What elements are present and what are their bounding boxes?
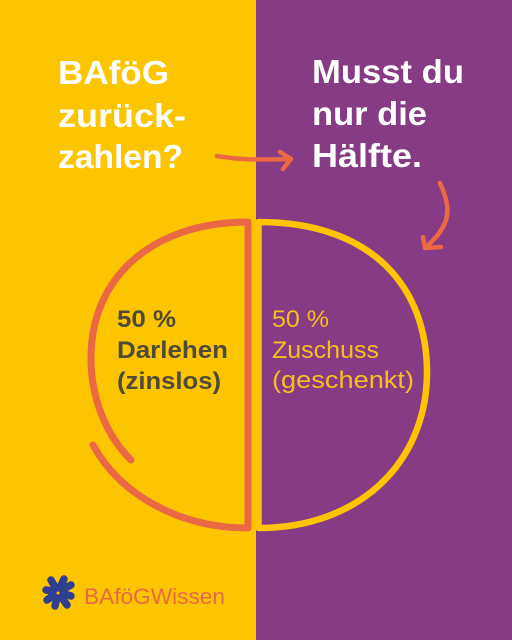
heading: question: zurück- bbox=[58, 97, 186, 134]
arrow: answer to chart bbox=[423, 183, 447, 248]
heading: answer: Musst du bbox=[312, 53, 464, 90]
label: 50 % grant bbox=[272, 306, 414, 394]
heading: question bbox=[58, 54, 186, 175]
label: 50 % loan bbox=[117, 306, 228, 395]
panel: yellow left background bbox=[0, 0, 256, 640]
heading: answer: nur die bbox=[312, 95, 427, 132]
panel: purple right background bbox=[256, 0, 512, 640]
chart: right half ring, grant bbox=[258, 222, 427, 528]
arrow: question to answer bbox=[217, 152, 291, 169]
chart: left half ring, loan bbox=[91, 222, 248, 528]
label: 50 % grant: Zuschuss bbox=[272, 337, 379, 364]
heading: question: BAföG bbox=[58, 54, 169, 91]
label: 50 % loan: Darlehen bbox=[117, 337, 228, 364]
heading: answer: Hälfte. bbox=[312, 137, 422, 174]
logo wordmark: BAföGWissen bbox=[84, 584, 225, 609]
label: 50 % grant: (geschenkt) bbox=[272, 367, 414, 394]
label: 50 % loan: (zinslos) bbox=[117, 368, 221, 395]
icon: BAföGWissen logo mark bbox=[46, 579, 71, 606]
label: 50 % grant: 50 % bbox=[272, 306, 329, 333]
label: 50 % loan: 50 % bbox=[117, 306, 176, 333]
heading: question: zahlen? bbox=[58, 138, 183, 175]
heading: answer bbox=[312, 53, 464, 174]
